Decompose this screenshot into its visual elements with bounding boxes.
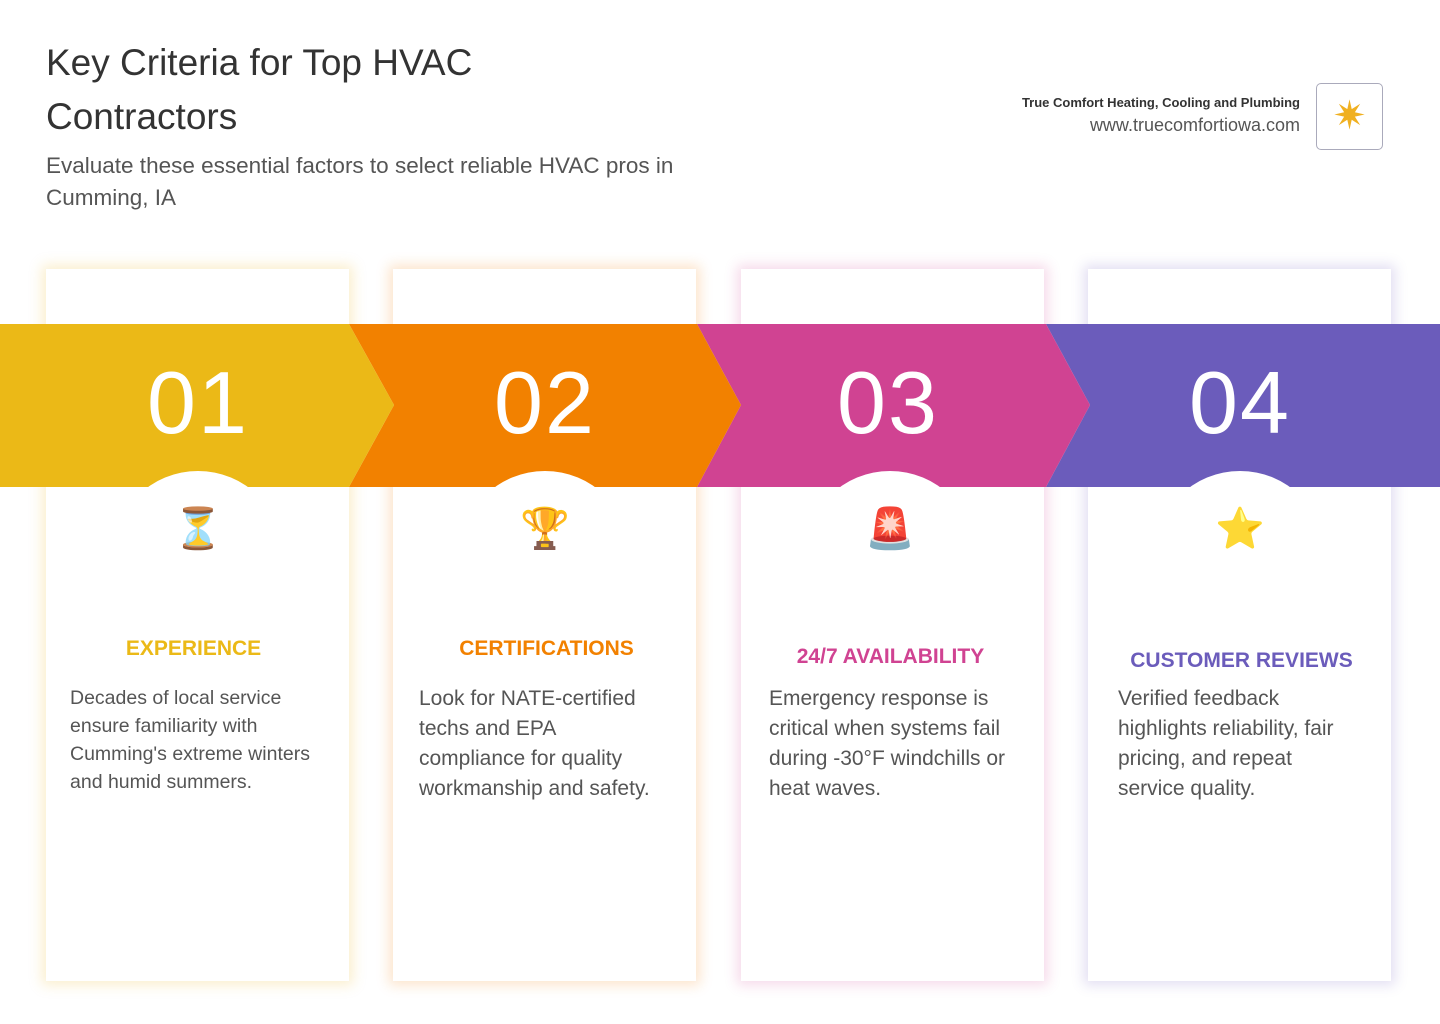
subtitle: Evaluate these essential factors to select reliable HVAC pros in: [46, 153, 673, 178]
icon: trophy: 🏆: [520, 505, 570, 552]
company info: True Comfort Heating, Cooling and Plumbing: [1022, 95, 1300, 110]
banner arrows: [0, 324, 1440, 487]
subtitle: [46, 153, 673, 210]
icon: star: ⭐: [1215, 505, 1265, 552]
logo: ✷: [1333, 94, 1366, 138]
company info: [1022, 95, 1300, 135]
text 3: Emergency response is critical when systems fail during -30°F windchills or heat waves.: [769, 687, 1005, 800]
heading 1: EXPERIENCE: [126, 637, 261, 660]
heading 2: CERTIFICATIONS: [459, 637, 634, 660]
number 04: 04: [1189, 353, 1291, 452]
card 3: [741, 269, 1044, 981]
title: [46, 42, 472, 137]
text 4: Verified feedback highlights reliability, fair pricing, and repeat service quality.: [1118, 687, 1334, 800]
icon: siren: 🚨: [865, 505, 915, 552]
circles: [112, 471, 284, 643]
title: Contractors: [46, 96, 237, 137]
text 2: Look for NATE-certified techs and EPA compliance for quality workmanship and safety.: [419, 687, 650, 800]
logo: [1316, 83, 1383, 150]
card 1: [46, 269, 349, 981]
title: Key Criteria for Top HVAC: [46, 42, 472, 83]
card 4: [1088, 269, 1391, 981]
number 01: 01: [147, 353, 249, 452]
card 2: [393, 269, 696, 981]
icon: hourglass: ⏳: [173, 505, 223, 552]
company info: www.truecomfortiowa.com: [1090, 115, 1300, 135]
text 1: Decades of local service ensure familiarity with Cumming's extreme winters and humid summers.: [70, 687, 310, 793]
number 03: 03: [837, 353, 939, 452]
number 02: 02: [494, 353, 596, 452]
heading 3: 24/7 AVAILABILITY: [797, 645, 984, 668]
heading 4: CUSTOMER REVIEWS: [1130, 649, 1353, 672]
subtitle: Cumming, IA: [46, 185, 176, 210]
